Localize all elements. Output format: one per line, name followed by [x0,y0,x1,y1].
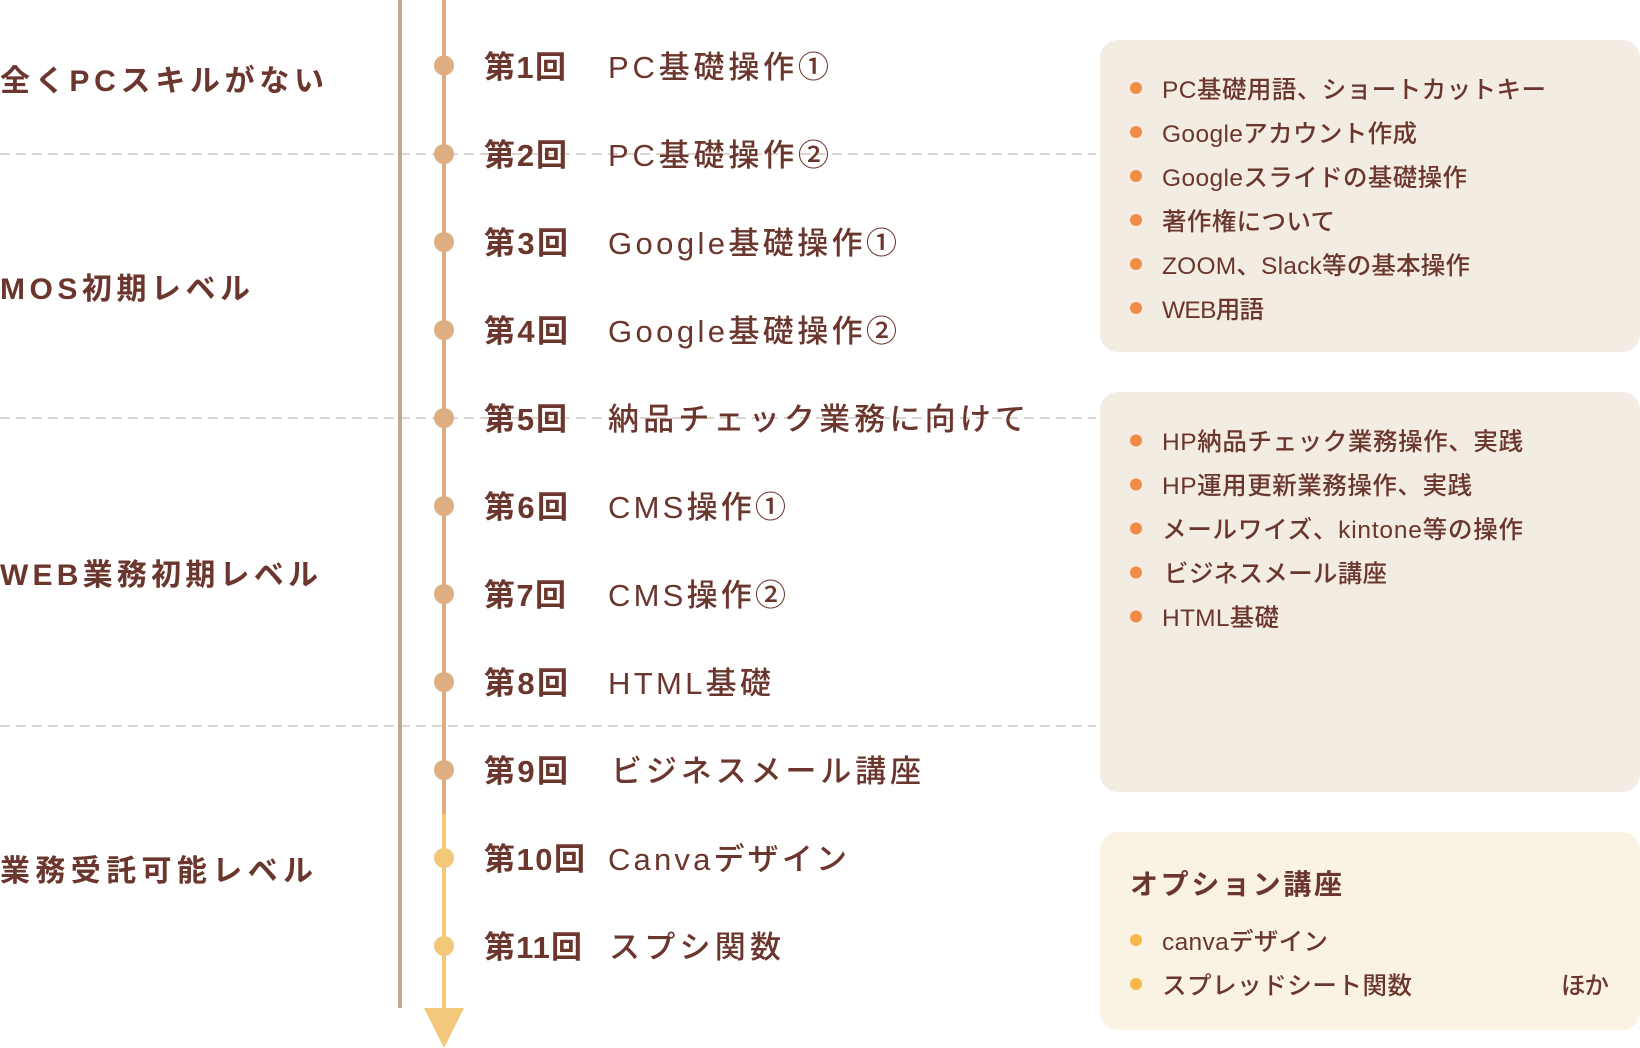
session 9 [434,754,921,789]
session 1: 第1回 [484,50,566,85]
session 5: 納品チェック業務に向けて [608,402,1026,437]
session 7: 第7回 [484,578,566,613]
level: contract-ready: 業務受託可能レベル [0,855,313,888]
session 9: ビジネスメール講座 [611,754,921,789]
level: no PC skills: 全くPCスキルがない [0,64,324,98]
bullet item: ビジネスメール講座 [1164,560,1387,588]
level: WEB work beginner: WEB業務初期レベル [0,559,318,592]
bullet item: canvaデザイン [1162,927,1328,956]
panel: optional courses [1100,832,1640,1030]
bullet item: 著作権について [1162,208,1335,236]
session 3 [434,226,897,261]
session 6 [434,490,786,525]
bullet item: HP運用更新業務操作、実践 [1162,472,1472,500]
session 10 [434,842,847,877]
bullet item: PC基礎用語、ショートカットキー [1162,76,1546,104]
panel heading: オプション講座 [1130,869,1342,900]
session 1: PC基礎操作① [608,50,829,85]
panel: basics topics [1100,40,1640,352]
session 7: CMS操作② [608,578,786,613]
session 2: 第2回 [484,138,567,173]
panel: web work topics [1100,392,1640,792]
session 4 [434,314,897,349]
bullet item: WEB用語 [1162,297,1264,324]
session 8: 第8回 [484,666,568,701]
bullet item: スプレッドシート関数 [1162,972,1412,1000]
session 4: 第4回 [484,314,568,349]
bullet item: Googleアカウント作成 [1162,120,1417,148]
note: and more: ほか [1561,973,1609,1000]
session 9: 第9回 [484,754,568,789]
bullet item: HTML基礎 [1162,604,1279,632]
session 6: 第6回 [484,490,568,525]
bullet item: メールワイズ、kintone等の操作 [1162,516,1523,544]
session 11: スプシ関数 [609,930,781,965]
timeline arrow head [424,1008,464,1048]
session 3: 第3回 [484,226,568,261]
session 10: 第10回 [484,842,585,877]
session 1 [434,50,829,85]
bullet item: HP納品チェック業務操作、実践 [1162,428,1523,456]
session 11: 第11回 [484,930,582,965]
session 7 [434,578,786,613]
session 2 [434,138,829,173]
session 6: CMS操作① [608,490,786,525]
session 10: Canvaデザイン [608,842,847,877]
level axis line [398,0,402,1008]
session 11 [434,930,781,965]
session 2: PC基礎操作② [608,138,829,173]
session 5: 第5回 [484,402,567,437]
session 8 [434,666,771,701]
bullet item: Googleスライドの基礎操作 [1162,164,1467,192]
bullet item: ZOOM、Slack等の基本操作 [1162,252,1470,280]
session 3: Google基礎操作① [608,226,897,261]
session 8: HTML基礎 [608,666,771,701]
timeline [424,0,464,1048]
session 4: Google基礎操作② [608,314,897,349]
level: MOS beginner: MOS初期レベル [0,273,250,306]
